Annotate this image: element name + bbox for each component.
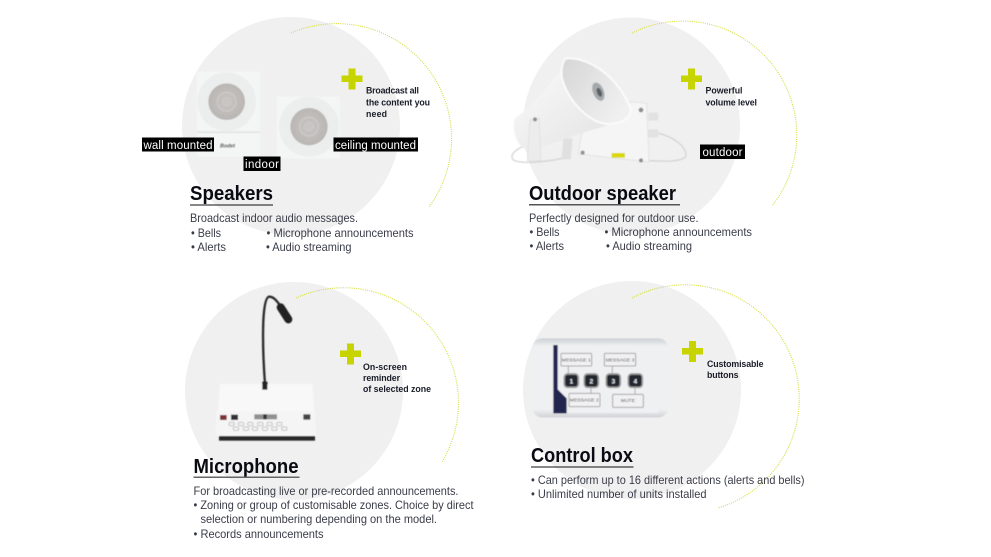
callout: broadcast: the content you — [366, 98, 430, 108]
icon: plus — [342, 68, 362, 90]
text: outdoor description: • Audio streaming — [606, 239, 692, 253]
text: speakers description: • Audio streaming — [266, 240, 352, 254]
text: microphone description: For broadcasting live or pre-recorded announcements. — [194, 484, 458, 498]
image: control box: MESSAGE 2 — [570, 398, 599, 404]
text: speakers description: • Bells — [191, 226, 221, 240]
label: ceiling mounted: ceiling mounted — [335, 140, 416, 152]
background circle: control box — [523, 281, 741, 499]
dotted arc: outdoor — [632, 21, 797, 206]
text: speakers description — [190, 211, 414, 254]
text: outdoor description: Perfectly designed for outdoor use. — [529, 211, 698, 225]
heading: outdoor speaker: Outdoor speaker — [529, 182, 676, 205]
text: outdoor description: • Alerts — [530, 239, 564, 253]
text: speakers description: • Alerts — [191, 240, 226, 254]
callout: powerful: volume level — [706, 98, 757, 108]
label: wall mounted: wall mounted — [142, 140, 212, 152]
callout: customisable buttons: Customisable — [707, 359, 764, 369]
icon: plus — [682, 341, 703, 362]
text: outdoor description: • Bells — [530, 225, 560, 239]
image: control box: 4 — [633, 378, 637, 385]
background circle: microphone — [185, 282, 403, 500]
callout: broadcast — [366, 86, 430, 119]
image: control box — [532, 338, 668, 417]
callout: on-screen reminder: On-screen — [363, 362, 407, 372]
gooseneck — [263, 297, 288, 391]
text: microphone description — [194, 484, 474, 541]
label: indoor: indoor — [245, 159, 279, 171]
image: control box: 1 — [569, 378, 573, 385]
background circle: speakers — [182, 17, 400, 235]
icon: plus — [681, 68, 702, 90]
text: outdoor description — [529, 211, 752, 253]
background circle: outdoor — [523, 18, 740, 234]
text: outdoor description: • Microphone announcements — [604, 225, 752, 239]
callout: on-screen reminder: of selected zone — [363, 384, 431, 394]
image: control box: 2 — [589, 378, 593, 385]
callout: broadcast: need — [366, 109, 387, 119]
text: microphone description: • Records announcements — [194, 527, 324, 541]
text: control box description — [531, 473, 804, 501]
callout: powerful — [706, 86, 757, 108]
text: speakers description: Broadcast indoor audio messages. — [190, 211, 358, 225]
image: control box: MESSAGE 3 — [606, 357, 635, 363]
image: wall mounted speaker — [197, 72, 260, 157]
panel: microphone — [185, 282, 474, 541]
label: outdoor: outdoor — [702, 147, 743, 159]
heading: speakers: Speakers — [190, 182, 273, 205]
callout: customisable buttons — [707, 359, 764, 380]
image: control box: MESSAGE 1 — [562, 357, 591, 363]
panel: speakers — [142, 17, 452, 254]
image: control box: 3 — [611, 378, 615, 385]
callout: broadcast: Broadcast all — [366, 86, 419, 96]
image: ceiling mounted speaker — [277, 97, 340, 158]
image: horn speaker — [512, 58, 686, 162]
text: microphone description: • Zoning or group of customisable zones. Choice by direct — [194, 498, 474, 512]
text: speakers description: • Microphone announcements — [266, 226, 414, 240]
callout: on-screen reminder — [363, 362, 431, 394]
heading: microphone: Microphone — [194, 455, 298, 478]
panel: control box — [523, 281, 804, 508]
heading: control box: Control box — [531, 444, 634, 467]
callout: powerful: Powerful — [706, 86, 742, 96]
image: wall mounted speaker: Bodet — [220, 143, 235, 149]
dotted arc: speakers — [291, 24, 452, 207]
panel: outdoor speaker — [512, 18, 797, 253]
icon: plus — [340, 344, 361, 364]
image: microphone — [216, 297, 316, 441]
image: control box: MUTE — [621, 398, 636, 404]
microphone base — [216, 382, 316, 441]
dotted arc: control box — [632, 285, 799, 508]
text: microphone description: selection or numbering depending on the model. — [200, 512, 437, 526]
text: control box description: • Unlimited number of units installed — [531, 487, 706, 501]
text: control box description: • Can perform up to 16 different actions (alerts and bells) — [531, 473, 804, 487]
callout: customisable buttons: buttons — [707, 370, 739, 380]
callout: on-screen reminder: reminder — [363, 373, 401, 383]
dotted arc: microphone — [296, 288, 458, 462]
